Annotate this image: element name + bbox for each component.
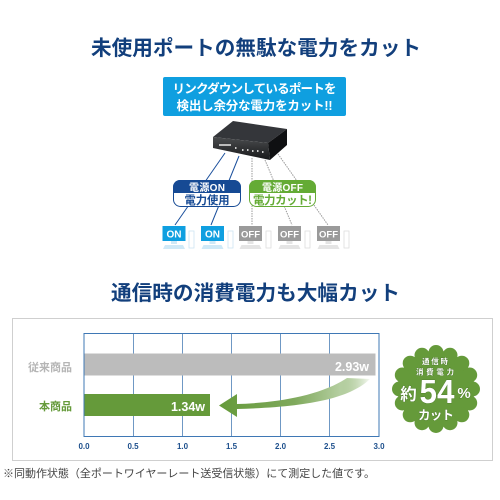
connection lines: switch to computers: [175, 153, 328, 225]
panel: chart frame: [12, 318, 492, 460]
axis labels: 1.0: [177, 442, 189, 451]
title: top heading: 未使用ポートの無駄な電力をカット: [91, 37, 421, 60]
badge: 54 percent cut: 約: [400, 385, 417, 404]
badge: 54 percent cut: カット: [418, 408, 454, 422]
arrow: reduction: [219, 378, 370, 417]
label: this product: 本商品: [39, 399, 72, 413]
badge: power off: 電力カット!: [253, 193, 312, 207]
icon: computer off 2: OFF: [280, 230, 299, 240]
badge: 54 percent cut: [392, 345, 480, 433]
icon: computer on 1: [162, 226, 194, 249]
icon: computer on 1: ON: [166, 230, 182, 240]
bar: previous product: [84, 354, 376, 376]
badge: power on: 電力使用: [184, 193, 230, 207]
axis labels: 1.5: [226, 442, 238, 451]
axis labels: 0.0: [78, 442, 90, 451]
bar chart: power consumption: [28, 334, 385, 451]
axis labels: 2.0: [275, 442, 287, 451]
icon: network switch: [213, 121, 287, 160]
icon: computer on 2: [201, 226, 233, 249]
badge: 54 percent cut: 消費電力: [416, 366, 454, 376]
bar: previous product: 2.93w: [335, 360, 369, 374]
badge: 54 percent cut: %: [457, 385, 471, 402]
icon: computer off 3: [317, 226, 349, 249]
bar: this product: 1.34w: [171, 400, 205, 414]
bar: this product: [84, 394, 210, 416]
badge: power on: 電源ON: [189, 181, 225, 194]
callout: link-down message: 検出し余分な電力をカット!!: [176, 98, 332, 113]
icon: computer off 3: OFF: [319, 230, 338, 240]
callout: link-down message: リンクダウンしているポートを: [172, 81, 336, 96]
badge: 54 percent cut: 通信時: [422, 356, 448, 366]
icon: computer off 2: [278, 226, 310, 249]
badge: power on: [173, 180, 241, 207]
badge: power off: 電源OFF: [262, 181, 303, 194]
icon: computer off 1: OFF: [241, 230, 260, 240]
axis labels: 2.5: [324, 442, 336, 451]
footnote: ※同動作状態（全ポートワイヤーレート送受信状態）にて測定した値です。: [3, 466, 375, 480]
icon: computer on 2: ON: [205, 230, 220, 240]
axis labels: [78, 442, 385, 451]
icon: computer off 1: [239, 226, 271, 249]
axis labels: 3.0: [373, 442, 385, 451]
axis labels: 0.5: [127, 442, 139, 451]
label: previous product: 従来商品: [28, 360, 72, 374]
title: second heading: 通信時の消費電力も大幅カット: [111, 282, 400, 305]
badge: power off: [249, 180, 316, 207]
callout: link-down message: [163, 77, 346, 116]
badge: 54 percent cut: 54: [420, 373, 455, 410]
chart grid: [84, 334, 379, 436]
